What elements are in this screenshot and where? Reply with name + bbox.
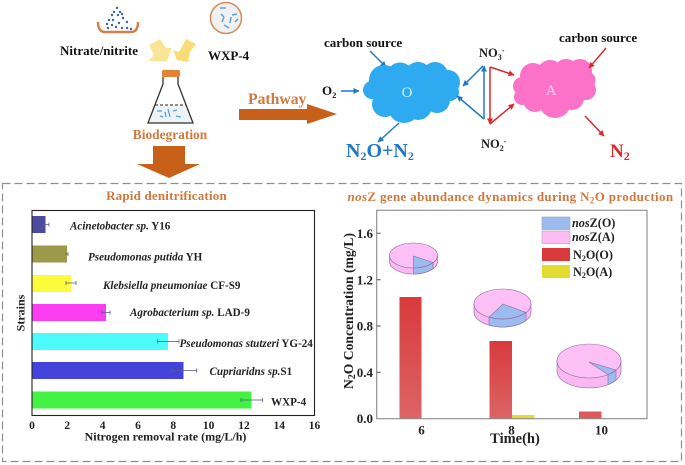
error bars [42,222,262,402]
y tick labels: 1.6 [357,226,374,241]
x tick labels: 8 [508,422,515,438]
heading: Rapid denitrification: Rapid denitrification [106,188,227,203]
y tick labels: 0.8 [357,318,374,334]
y tick labels: 0.4 [357,365,374,380]
axis ticks [377,233,381,372]
label: N2: 2 [624,149,630,163]
y axis title: Strains [14,294,28,331]
x axis ticks [29,420,320,432]
y tick labels: 0.0 [357,411,373,426]
x axis ticks: 14 [274,420,285,432]
arrow: O to N2O+N2 [378,123,399,142]
arrow: carbon source to O [370,51,386,67]
legend [542,216,615,280]
label: N2O+N2: O+N [366,140,408,162]
label: carbon source left: carbon source [324,35,402,50]
x axis ticks: 4 [100,420,106,432]
icon: WXP-4 cell [210,2,242,34]
arrows: red nitrogen cycle [490,67,514,124]
label: NO3-: NO [479,46,498,60]
legend: nosZ(A) [572,230,615,244]
x tick labels: 10 [595,422,608,438]
arrow: A to N2 [585,116,604,136]
cloud: A [513,59,596,118]
legend: O(O) [586,248,613,262]
label: carbon source right: carbon source [559,30,637,45]
y tick labels: 1.2 [357,272,373,288]
bars [32,216,252,408]
x axis ticks: 2 [64,420,70,432]
axes frame [377,210,647,419]
label: N2O+N2: N [346,140,360,162]
panel: dashed border [2,184,682,462]
heading: nosZ dynamics: nosZ gene abundance dynamics during N [348,189,590,204]
pie: 10h [557,344,621,388]
x axis title: Nitrogen removal rate (mg/L/h) [85,430,246,444]
label: O2: O [322,83,332,98]
legend: N [573,265,582,279]
label: Biodegration: Biodegration [133,127,208,142]
N2O bars [400,297,602,418]
heading: nosZ dynamics: 2 [590,196,595,206]
y axis title: N [341,379,356,389]
strain labels: Pseudomonas stutzeri YG-24 [180,338,313,350]
cloud: A: A [546,83,557,99]
x axis ticks: 12 [238,420,250,432]
arrow: pathway [239,104,337,124]
arrow: O2 to cloud [341,90,359,92]
strain labels: WXP-4 [271,396,307,408]
legend: O(A) [586,265,612,279]
x axis ticks: 0 [29,420,35,432]
icon: flask [148,70,193,123]
cloud: O: O [402,85,413,101]
label: N2: N [610,141,624,162]
label: N2O+N2: 2 [360,149,366,163]
y axis title: O Concentration (mg/L) [341,233,357,374]
pie: 6h [390,243,438,274]
axes frame [32,210,314,416]
strain labels: Cupriaridns sp.S1 [210,366,292,378]
x tick labels [418,422,608,438]
strain labels [69,220,313,408]
panel: rapid denitrification chart [14,188,320,444]
arrows: blue nitrogen cycle [457,66,484,119]
label: NO2-: 2 [500,144,504,153]
strain labels: Agrobacterium sp. LAD-9 [129,307,250,319]
panel: nosZ and N2O chart [341,189,674,447]
strain labels: Pseudomonas putida YH [88,252,203,264]
label: Nitrate/nitrite: Nitrate/nitrite [60,43,138,58]
heading: nosZ dynamics: O production [595,189,674,204]
strain labels: Klebsiella pneumoniae CF-S9 [102,280,241,292]
arrow: carbon source to A [589,48,606,68]
legend: N [573,248,582,262]
x axis title: Time(h) [490,431,540,447]
pie: 8h [474,289,531,327]
cloud: O [363,62,460,123]
legend: 2 [582,271,586,280]
y axis title: 2 [347,374,358,379]
label: NO3-: 3 [498,53,502,62]
x tick labels: 6 [418,422,425,438]
label: O2: 2 [332,90,336,100]
x axis ticks: 8 [170,420,176,432]
label: WXP-4: WXP-4 [208,48,250,63]
icon: nitrate/nitrite bowl [98,7,138,32]
x axis ticks: 6 [135,420,141,432]
legend: 2 [582,254,586,263]
label: NO3-: - [502,46,505,55]
label: Pathway: Pathway [248,91,307,108]
legend: nosZ(O) [572,216,615,230]
x axis ticks: 16 [309,420,320,432]
label: NO2-: NO [481,137,500,151]
y tick labels [357,226,374,426]
label: N2O+N2: 2 [408,149,414,163]
strain labels: Acinetobacter sp. Y16 [69,220,171,232]
x axis ticks: 10 [203,420,215,432]
label: NO2-: - [504,137,507,146]
arrow: down to panels [137,146,200,178]
arrows: yellow inputs [148,39,196,62]
